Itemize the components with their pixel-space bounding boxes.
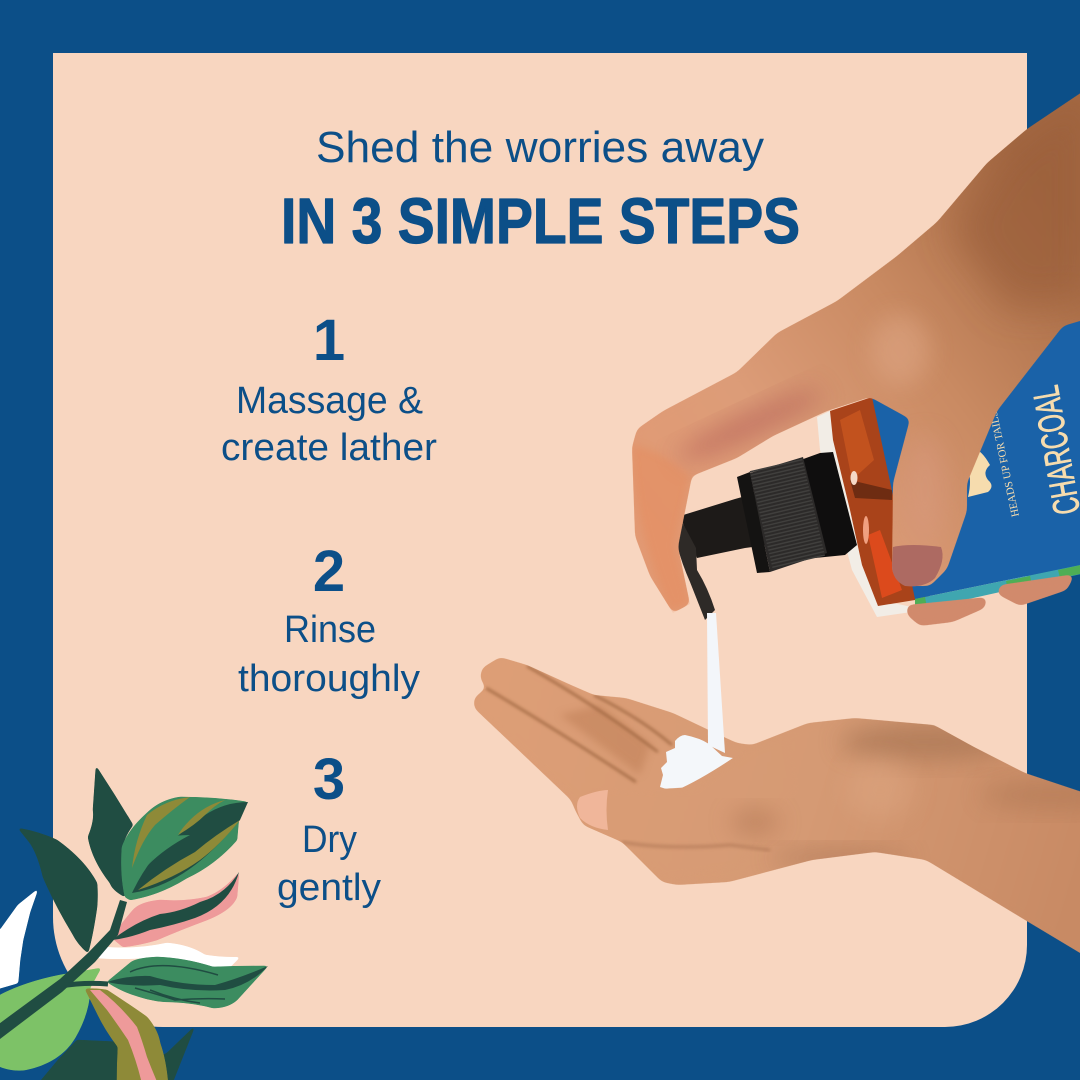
pink striped stalk leaf (85, 989, 168, 1080)
thumb nail (892, 545, 943, 586)
pump collar (750, 457, 827, 572)
lower hand base (474, 657, 1080, 965)
step 3 number: 3 (313, 747, 345, 812)
step 2 text: thoroughly (238, 658, 420, 700)
thumb nail (577, 790, 608, 830)
pink leaf (112, 872, 239, 947)
step 3 text: Dry (302, 819, 357, 861)
step 1 (221, 308, 437, 469)
pump nozzle (677, 518, 715, 620)
lower hand finger creases (486, 666, 672, 782)
thumb over foam (575, 735, 800, 880)
lower hand shading (622, 724, 1080, 867)
light green leaf (0, 968, 101, 1070)
upper hand base (632, 80, 1080, 613)
dark bottom leaf (38, 1026, 195, 1080)
title (281, 123, 800, 257)
step 3 (277, 747, 381, 909)
icon: lower hand with foam (474, 657, 1080, 965)
bottle label (872, 290, 1080, 599)
dark leaf top (88, 766, 133, 897)
step 1 text: Massage & (236, 380, 423, 422)
subtitle line: Shed the worries away (316, 123, 764, 172)
pump front band (737, 472, 770, 573)
bottom green leaf (107, 957, 268, 1008)
step 2 number: 2 (313, 539, 345, 604)
branch stem (0, 900, 127, 1042)
upper hand shading (632, 80, 1080, 612)
foam dollop (660, 735, 733, 790)
icon: botanical leaf branch (0, 766, 268, 1080)
white back leaf (0, 889, 38, 990)
icon: upper hand pressing pump (632, 80, 1080, 626)
step 3 text: gently (277, 867, 381, 909)
branch twig (60, 983, 108, 986)
amber highlight patches (840, 410, 902, 598)
icon: shampoo bottle (677, 290, 1080, 620)
step 1 number: 1 (313, 308, 345, 373)
main heading: IN 3 SIMPLE STEPS (281, 185, 800, 257)
fingers under bottle (907, 574, 1075, 626)
pump stem (680, 492, 768, 558)
soap stream (707, 613, 725, 753)
label bottom stripe (915, 563, 1080, 611)
stripe green accents (915, 563, 1080, 611)
striped green leaf (121, 797, 248, 900)
white stripe leaf (97, 943, 240, 970)
collar ribs (776, 465, 799, 563)
label logo (968, 450, 992, 497)
step 2 text: Rinse (284, 609, 376, 651)
bottle white shoulder (817, 410, 925, 617)
step 2 (238, 539, 420, 700)
step 1 text: create lather (221, 427, 437, 469)
dark leaf left (18, 828, 98, 953)
label brand text: HEADS UP FOR TAILS (988, 410, 1022, 518)
bottle amber body (830, 397, 930, 606)
bottle neck (795, 452, 857, 558)
